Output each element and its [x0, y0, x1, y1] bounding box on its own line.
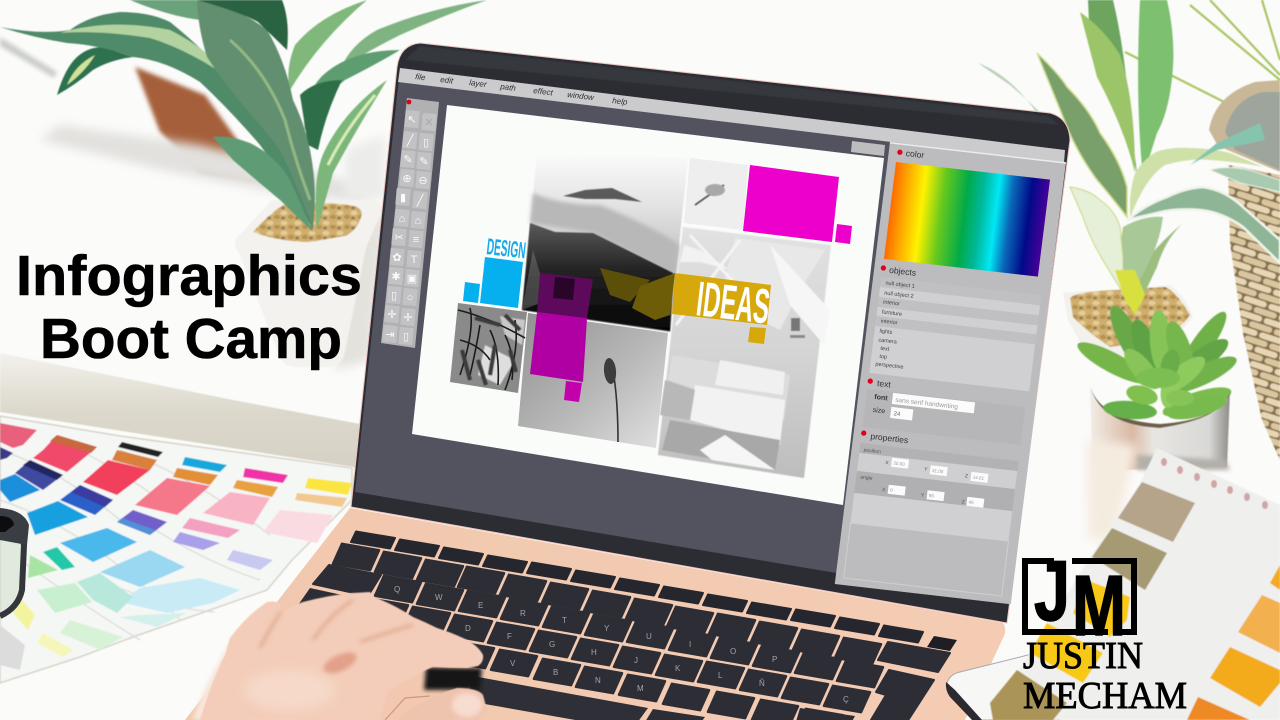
- tool icons: ╱: [416, 193, 425, 207]
- properties side panel: [835, 142, 1066, 604]
- fingertip shadow on keys: [424, 667, 482, 690]
- key legends: Ç: [843, 695, 849, 704]
- key legends: Q: [394, 585, 400, 594]
- text section: sans serif handwriting: [895, 397, 959, 411]
- properties section: 20.00: [893, 460, 906, 467]
- pale skin fade at wrist: [192, 638, 300, 720]
- phone beside the laptop: [946, 652, 1060, 720]
- heading: IDEAS: IDEAS: [694, 272, 773, 335]
- key legends: Ñ: [759, 679, 765, 688]
- knuckle shading: [320, 648, 360, 678]
- finger shading: [260, 600, 413, 648]
- keyboard: [296, 532, 957, 720]
- logo: Justin Mecham: [1023, 544, 1187, 717]
- photo: foggy mountain village: [522, 153, 688, 332]
- logo monogram: J: [1034, 544, 1070, 639]
- objects section: text: [880, 346, 890, 353]
- key legends: M: [637, 684, 644, 693]
- objects section: null object 1: [885, 281, 915, 290]
- overlay: dark gold: [600, 268, 650, 302]
- base with keyboard deck: [185, 508, 1005, 720]
- tool icons: ≡: [413, 234, 419, 246]
- key legends: N: [595, 676, 601, 685]
- key legends: T: [562, 616, 567, 625]
- key legends: G: [549, 640, 555, 649]
- leaves: [340, 0, 487, 70]
- grey pot in woven rim: [1209, 80, 1280, 172]
- objects section: interior: [883, 300, 900, 307]
- tool icons: ✿: [392, 252, 402, 264]
- thumb: [397, 688, 487, 720]
- text section: text: [877, 378, 892, 390]
- properties section: 45: [968, 500, 975, 505]
- letter row two: [296, 588, 934, 720]
- overlay: dark purple square: [537, 273, 593, 318]
- tool icons: [385, 114, 434, 343]
- gravel: [1070, 287, 1190, 347]
- tool icons: T: [411, 254, 418, 266]
- tool icons: ▣: [407, 273, 417, 285]
- key legends: B: [553, 668, 558, 677]
- properties section: Y: [924, 467, 928, 473]
- number row: [333, 544, 950, 672]
- book under the swatch fan: [0, 353, 360, 468]
- key legends: K: [675, 664, 681, 673]
- metal pot: [1090, 383, 1230, 470]
- menu bar: file: [415, 72, 427, 82]
- tool icons: ✎: [419, 156, 429, 168]
- properties section: X: [885, 460, 890, 466]
- properties section: 14.61: [973, 475, 985, 481]
- objects section: interior: [880, 319, 898, 326]
- succulent back leaves: [1073, 301, 1241, 423]
- key legends: [394, 585, 849, 704]
- icon: glasses on the swatches: [0, 508, 29, 616]
- letter row one: [313, 565, 883, 687]
- trackpad outline: [385, 696, 430, 720]
- lid: [351, 43, 1070, 623]
- artboard collage: DESIGN: [485, 233, 527, 263]
- key legends: V: [510, 659, 516, 668]
- tool icons: ⌂: [399, 213, 405, 225]
- text section: font: [874, 394, 889, 402]
- colour block: blue small: [463, 282, 480, 303]
- key legends: J: [634, 656, 638, 665]
- key legends: F: [507, 632, 512, 641]
- colour section: [884, 147, 1052, 277]
- tool icons: ⊕: [402, 173, 412, 185]
- logo: Justin Mecham: M: [1072, 559, 1126, 654]
- artboard: [412, 105, 884, 505]
- hand on keyboard: [192, 592, 487, 720]
- tool panel: [381, 98, 439, 348]
- key legends: H: [591, 648, 597, 657]
- tool icons: ⌂: [415, 215, 421, 227]
- key legends: D: [465, 624, 471, 633]
- colour block: purple large: [530, 312, 587, 382]
- tool icons: ✛: [387, 309, 397, 321]
- objects section: furniture: [882, 310, 902, 318]
- properties section: X: [882, 487, 886, 493]
- tool icons: ╱: [406, 133, 415, 147]
- colour block: magenta small: [835, 224, 852, 244]
- logo: Justin Mecham: MECHAM: [1023, 675, 1187, 717]
- menu bar: path: [499, 82, 517, 93]
- colour swatch fan: [0, 416, 352, 683]
- properties section: [843, 430, 1020, 596]
- colour block: blue large: [480, 257, 523, 308]
- tool icons: ⊖: [418, 175, 428, 187]
- hanging grass: [1125, 0, 1280, 115]
- pot: [235, 200, 381, 367]
- colour block: purple small: [564, 381, 582, 402]
- photo: loft room: [658, 227, 831, 478]
- properties section: 90: [929, 493, 935, 499]
- tool icons: ○: [407, 292, 413, 304]
- tool icons: ▯: [403, 331, 409, 343]
- key legends: P: [772, 655, 777, 664]
- tool icons: ⇥: [385, 329, 395, 341]
- tool icons: ↖: [407, 114, 417, 126]
- photo: pine branches: [450, 303, 527, 393]
- right plants, basket and succulent: [978, 0, 1280, 540]
- tool icons: ✎: [403, 154, 413, 166]
- tool icons: ✱: [391, 271, 401, 283]
- blurred pale pot reflection: [1087, 440, 1137, 540]
- properties section: 0: [890, 487, 893, 493]
- white pot behind succulent: [1063, 285, 1193, 360]
- text section: 24: [893, 411, 901, 418]
- colour block: magenta large: [743, 165, 839, 242]
- tool icons: ▯: [391, 290, 397, 302]
- left plant with white pot: [0, 0, 487, 370]
- function row: [351, 532, 957, 651]
- text section: [862, 377, 1027, 445]
- tool icons: ✛: [403, 312, 413, 324]
- objects section: null object 2: [884, 291, 914, 300]
- title: [16, 244, 362, 370]
- menu bar: edit: [440, 75, 454, 86]
- key legends: L: [718, 671, 723, 680]
- menu bar: effect: [533, 86, 554, 97]
- back of hand and fingers: [200, 592, 483, 720]
- properties section: Z: [961, 499, 965, 506]
- objects section: [868, 264, 1043, 391]
- photo: ink blot: [684, 158, 748, 230]
- thumb nail: [452, 693, 482, 717]
- colour section: color: [905, 148, 925, 160]
- key legends: Y: [604, 624, 610, 633]
- tab button: [851, 141, 885, 156]
- properties section: position: [863, 447, 881, 455]
- tool icons: ▮: [400, 192, 406, 204]
- plant leaves: [978, 63, 1065, 140]
- key legends: R: [520, 609, 526, 618]
- key legends: E: [478, 601, 483, 610]
- screen: [355, 68, 1065, 602]
- key legends: I: [689, 640, 691, 649]
- laptop: [185, 43, 1070, 720]
- menu bar: layer: [469, 78, 487, 89]
- tool icons: ▯: [423, 137, 429, 149]
- tool icons: ✂: [394, 232, 404, 244]
- front succulent leaves: [1102, 368, 1228, 424]
- objects section: top: [879, 354, 887, 361]
- objects section: lights: [879, 329, 893, 336]
- objects section: camera: [878, 338, 898, 346]
- properties section: Z: [965, 473, 968, 480]
- wicker basket: [1228, 165, 1280, 460]
- rainbow colour picker: [884, 162, 1050, 277]
- soil: [253, 203, 362, 242]
- menu bar: window: [567, 90, 596, 102]
- yellow band: [672, 273, 771, 325]
- key legends: U: [646, 632, 652, 641]
- artboard collage: [450, 153, 852, 478]
- top bezel highlight: [405, 46, 1060, 125]
- tool icons: ✕: [424, 117, 434, 129]
- logo wordmark: JUSTIN: [1023, 635, 1143, 677]
- spiral colour notepad: [990, 448, 1280, 720]
- key legends: O: [730, 647, 736, 656]
- letter row three and space bar: [448, 642, 855, 720]
- menu bar: [398, 68, 1065, 163]
- text section: size: [872, 407, 886, 415]
- colour block: yellow small: [748, 327, 766, 344]
- properties section: Y: [921, 493, 925, 499]
- red status dot: [407, 100, 411, 104]
- properties section: angle: [860, 474, 873, 482]
- menu bar: help: [612, 96, 628, 107]
- pot shadow: [335, 215, 385, 370]
- blurred furniture behind left plant: [0, 37, 385, 203]
- objects section: perspective: [875, 362, 904, 371]
- properties section: 31.00: [932, 468, 944, 474]
- objects section: objects: [889, 265, 917, 278]
- logo frame: [1025, 561, 1134, 632]
- key legends: W: [435, 593, 443, 602]
- photo: plant on grey: [518, 313, 668, 448]
- properties section: properties: [870, 431, 909, 445]
- title: Boot Camp: [40, 307, 342, 370]
- title: Infographics: [16, 244, 362, 307]
